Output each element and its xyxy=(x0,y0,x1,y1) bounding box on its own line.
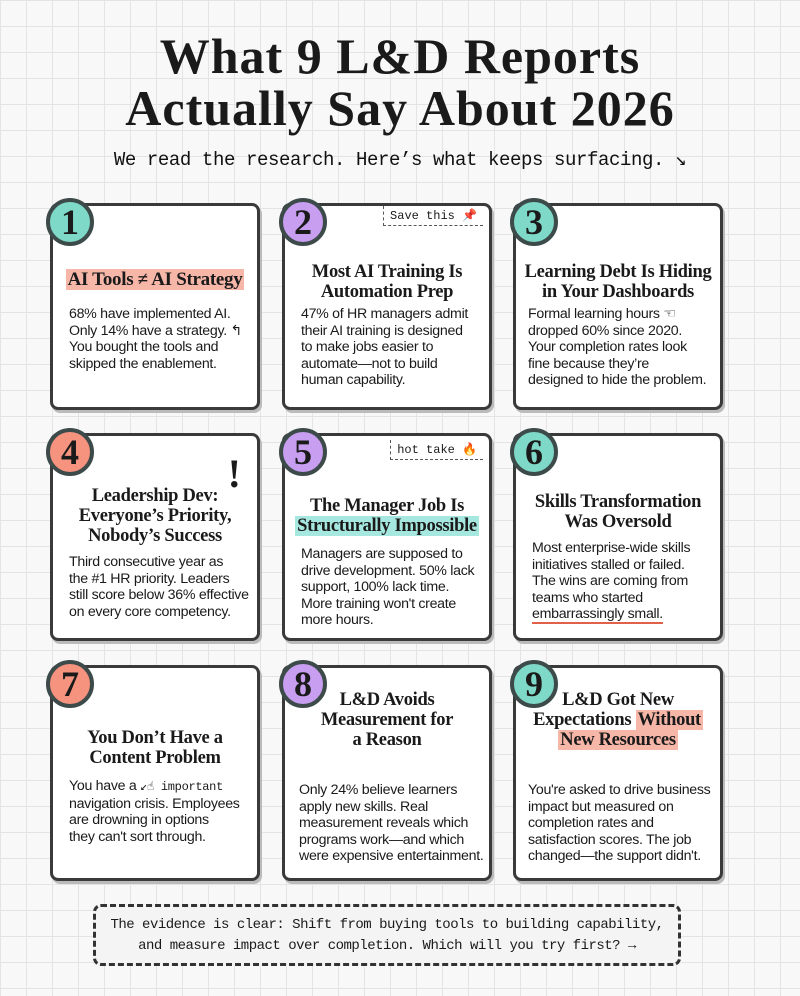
body 3 xyxy=(528,306,706,388)
body 5: More training won't create xyxy=(301,596,456,612)
heading 7 xyxy=(87,728,223,768)
icon: number 8 xyxy=(279,660,327,708)
heading 6 xyxy=(535,492,702,532)
body 7: are drowning in options xyxy=(69,812,209,828)
body 6: embarrassingly small. xyxy=(532,606,663,622)
body 6: initiatives stalled or failed. xyxy=(532,556,685,572)
icon: number 9 xyxy=(510,660,558,708)
title: Actually Say About 2026 xyxy=(125,80,675,136)
body 3: fine because they’re xyxy=(528,356,649,372)
body 6: teams who started xyxy=(532,590,643,606)
heading 2: Most AI Training Is xyxy=(312,262,462,282)
body 3: Your completion rates look xyxy=(528,339,687,355)
body 7: You have a ↙☝ important xyxy=(69,778,223,794)
body 1: Only 14% have a strategy. ↰ xyxy=(69,322,242,338)
subtitle: We read the research. Here’s what keeps surfacing. ↘ xyxy=(114,149,686,171)
icon: number 7: 7 xyxy=(61,664,79,704)
body 5 xyxy=(301,546,474,628)
heading 6: Skills Transformation xyxy=(535,492,701,512)
body 1: skipped the enablement. xyxy=(69,356,217,372)
body 2: to make jobs easier to xyxy=(301,339,433,355)
body 9: You're asked to drive business xyxy=(528,782,710,798)
callout: footer: and measure impact over completion. Which will you try first? → xyxy=(138,938,636,954)
body 6: Most enterprise-wide skills xyxy=(532,540,690,556)
body 8: apply new skills. Real xyxy=(299,798,428,814)
panel: card 6 xyxy=(513,433,723,641)
heading 9: New Resources xyxy=(560,730,676,750)
body 9: satisfaction scores. The job xyxy=(528,832,691,848)
heading 4: Leadership Dev: xyxy=(92,486,218,506)
callout: footer: The evidence is clear: Shift from buying tools to building capability, xyxy=(110,917,664,933)
body 2: their AI training is designed xyxy=(301,322,463,338)
heading 4: Everyone’s Priority, xyxy=(79,506,231,526)
icon: number 6: 6 xyxy=(525,432,543,472)
body 8: measurement reveals which xyxy=(299,815,468,831)
body 7 xyxy=(69,778,240,844)
panel: card 5 xyxy=(282,433,492,641)
icon: number 2: 2 xyxy=(294,202,312,242)
icon: number 9: 9 xyxy=(525,664,543,704)
panel: card 8 xyxy=(282,665,492,881)
heading 5: The Manager Job Is xyxy=(310,496,464,516)
body 8 xyxy=(299,782,484,864)
icon: exclamation: ! xyxy=(228,451,241,496)
body 6: The wins are coming from xyxy=(532,573,688,589)
heading 2: Automation Prep xyxy=(321,282,453,302)
heading 2 xyxy=(312,262,462,302)
body 3: designed to hide the problem. xyxy=(528,372,706,388)
heading 5: Structurally Impossible xyxy=(297,516,477,536)
body 9: impact but measured on xyxy=(528,798,674,814)
icon: number 7 xyxy=(46,660,94,708)
heading 3: in Your Dashboards xyxy=(542,282,694,302)
body 3: Formal learning hours ☜ xyxy=(528,306,676,322)
body 2: 47% of HR managers admit xyxy=(301,306,468,322)
body 5: more hours. xyxy=(301,612,373,628)
body 2 xyxy=(301,306,468,388)
icon: number 5 xyxy=(279,428,327,476)
heading 6: Was Oversold xyxy=(565,512,671,532)
body 9: completion rates and xyxy=(528,815,654,831)
panel: card 7 xyxy=(50,665,260,881)
body 8: programs work—and which xyxy=(299,832,464,848)
heading 9: L&D Got New xyxy=(562,690,674,710)
tag hot take: hot take 🔥 xyxy=(397,443,477,457)
heading 7: Content Problem xyxy=(89,748,221,768)
body 4: the #1 HR priority. Leaders xyxy=(69,570,229,586)
heading 9: Expectations Without xyxy=(533,710,701,730)
panel: card 9 xyxy=(513,665,723,881)
icon: number 3: 3 xyxy=(525,202,543,242)
icon: number 8: 8 xyxy=(294,664,312,704)
body 2: human capability. xyxy=(301,372,405,388)
icon: number 2 xyxy=(279,198,327,246)
body 9 xyxy=(528,782,710,864)
body 6 xyxy=(532,540,690,624)
body 4: still score below 36% effective xyxy=(69,587,249,603)
body 8: were expensive entertainment. xyxy=(299,848,484,864)
icon: number 4 xyxy=(46,428,94,476)
body 7: they can't sort through. xyxy=(69,828,206,844)
callout: footer xyxy=(93,904,681,966)
title: What 9 L&D Reports xyxy=(160,28,640,84)
icon: number 1 xyxy=(46,198,94,246)
tag save this xyxy=(383,206,483,226)
body 4: on every core competency. xyxy=(69,604,231,620)
heading 7: You Don’t Have a xyxy=(87,728,223,748)
body 8: Only 24% believe learners xyxy=(299,782,457,798)
title xyxy=(125,28,675,136)
body 4: Third consecutive year as xyxy=(69,554,223,570)
icon: number 3 xyxy=(510,198,558,246)
tag save this: Save this 📌 xyxy=(390,209,477,223)
icon: number 6 xyxy=(510,428,558,476)
heading 3 xyxy=(524,262,712,302)
tag hot take xyxy=(390,440,483,460)
body 5: support, 100% lack time. xyxy=(301,579,449,595)
heading 9 xyxy=(533,690,703,750)
body 9: changed—the support didn't. xyxy=(528,848,701,864)
heading 5 xyxy=(295,496,479,536)
heading 3: Learning Debt Is Hiding xyxy=(525,262,711,282)
panel: card 4 xyxy=(50,433,260,641)
panel: card 1 xyxy=(50,203,260,410)
body 4 xyxy=(69,554,249,620)
heading 8: a Reason xyxy=(352,730,422,750)
body 1: 68% have implemented AI. xyxy=(69,306,231,322)
body 2: automate—not to build xyxy=(301,356,437,372)
body 3: dropped 60% since 2020. xyxy=(528,322,682,338)
icon: number 1: 1 xyxy=(61,202,79,242)
heading 8: L&D Avoids xyxy=(340,690,434,710)
heading 8 xyxy=(321,690,454,750)
heading 8: Measurement for xyxy=(321,710,453,730)
body 1: You bought the tools and xyxy=(69,339,218,355)
heading 4: Nobody’s Success xyxy=(88,526,222,546)
body 1 xyxy=(69,306,242,372)
heading 1: AI Tools ≠ AI Strategy xyxy=(68,269,242,290)
icon: number 5: 5 xyxy=(294,432,312,472)
body 5: drive development. 50% lack xyxy=(301,562,474,578)
heading 4 xyxy=(79,486,231,546)
panel: card 3 xyxy=(513,203,723,410)
body 7: navigation crisis. Employees xyxy=(69,796,240,812)
icon: number 4: 4 xyxy=(61,432,79,472)
body 5: Managers are supposed to xyxy=(301,546,463,562)
panel: card 2 xyxy=(282,203,492,410)
